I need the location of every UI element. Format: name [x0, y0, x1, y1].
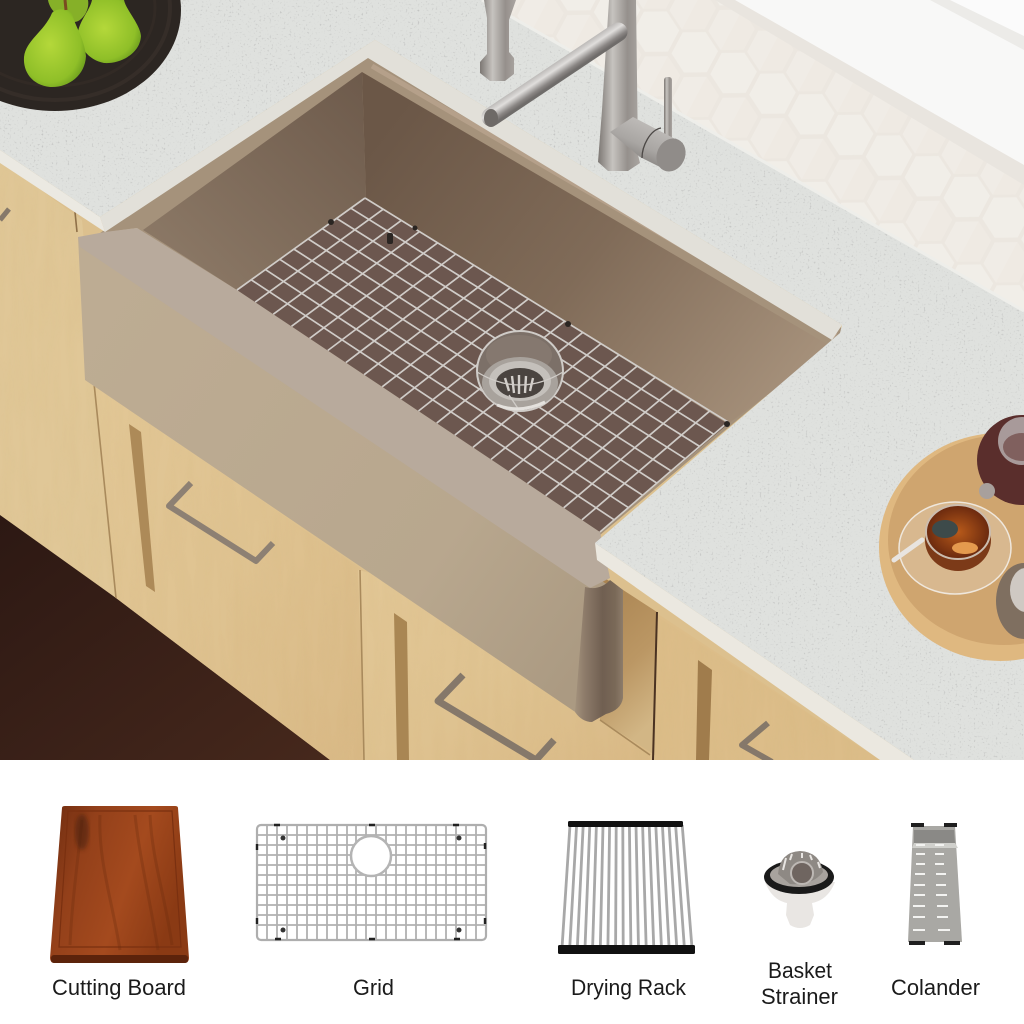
saucer [899, 502, 1011, 594]
accessory: colander [908, 825, 962, 943]
strainer basket [778, 851, 823, 884]
accessory: grid [257, 825, 486, 940]
floor [0, 510, 330, 760]
counter right front edge [595, 543, 914, 760]
sink apron upper band [78, 228, 610, 588]
spoon [894, 540, 922, 560]
label: colander: Colander [891, 975, 980, 1000]
colander slots [913, 845, 950, 930]
board bottom edge [51, 955, 188, 963]
cabinet: center door [116, 598, 330, 760]
strainer body [765, 882, 835, 928]
cabinet: left door [0, 160, 116, 598]
board grain [70, 815, 172, 950]
colander handles [909, 825, 960, 943]
rack bottom bar [558, 945, 695, 954]
tray rim [879, 433, 1024, 661]
label: basket strainer [761, 958, 838, 1009]
window sill [716, 0, 1024, 165]
door groove 3 [696, 660, 712, 760]
counter speckle texture [0, 0, 1024, 760]
counter back edge highlight [482, 0, 1024, 311]
plate [0, 0, 181, 111]
backsplash: hexagon tile [482, 0, 1024, 311]
faucet handle body [610, 117, 683, 171]
faucet post [598, 0, 640, 171]
sink back wall [362, 72, 788, 416]
pear left [24, 9, 86, 87]
panel: kitchen scene [0, 0, 1024, 762]
tea cup [925, 509, 991, 571]
panel: cabinets [0, 181, 774, 760]
panel: speckled countertop [0, 0, 1024, 760]
label: drying rack: Drying Rack [571, 975, 687, 1000]
tray inner [888, 435, 1024, 645]
drain strainer [477, 331, 563, 411]
accessory: drying rack [558, 821, 695, 954]
glass jar [996, 563, 1024, 639]
wood grain texture [0, 0, 1024, 760]
label: basket strainer: Strainer [761, 984, 838, 1009]
accessory: cutting board [50, 806, 189, 963]
sink back molding [372, 66, 836, 336]
handle: left door [0, 209, 9, 220]
cabinet gap lines [94, 383, 650, 760]
grid feet [328, 219, 730, 427]
label: basket strainer: Basket [768, 958, 832, 983]
counter top surface [0, 0, 1024, 760]
scene underlay [0, 40, 914, 760]
sprayer head [480, 0, 516, 81]
grid rubber bumpers [257, 825, 485, 939]
pear back [48, 0, 88, 22]
handle: right drawer [438, 675, 554, 760]
teapot [977, 415, 1024, 505]
door groove 2 [394, 613, 409, 760]
cabinet: far right door [655, 612, 880, 760]
strainer flange [764, 860, 834, 894]
faucet lever [664, 77, 672, 141]
accessory: basket strainer [764, 851, 835, 928]
faucet spout [491, 32, 618, 117]
grid drain hole [351, 836, 391, 876]
grid frame [257, 825, 486, 940]
faucet [480, 0, 691, 176]
pear right [78, 0, 141, 63]
tea tray [879, 415, 1024, 661]
cabinet: shaded side behind sink [600, 575, 657, 755]
board juice groove [59, 811, 181, 947]
sink rim [100, 50, 845, 535]
label: cutting board: Cutting Board [52, 975, 186, 1000]
sink left wall [143, 72, 366, 290]
handle: far right [742, 723, 772, 762]
door groove 1 [129, 424, 155, 592]
counter inner edge around sink [100, 40, 842, 340]
sink apron corner shading [575, 580, 623, 722]
label: grid: Grid [353, 975, 394, 1000]
rack top bar [568, 821, 683, 827]
cabinet: right drawer [358, 570, 364, 681]
sink grid [237, 198, 728, 532]
sink apron front [78, 237, 622, 722]
sink floor [237, 198, 728, 532]
handle: center door [169, 483, 273, 561]
panel: farmhouse sink [78, 50, 845, 722]
plate with pears [0, 0, 181, 111]
counter left front edge [0, 150, 105, 232]
